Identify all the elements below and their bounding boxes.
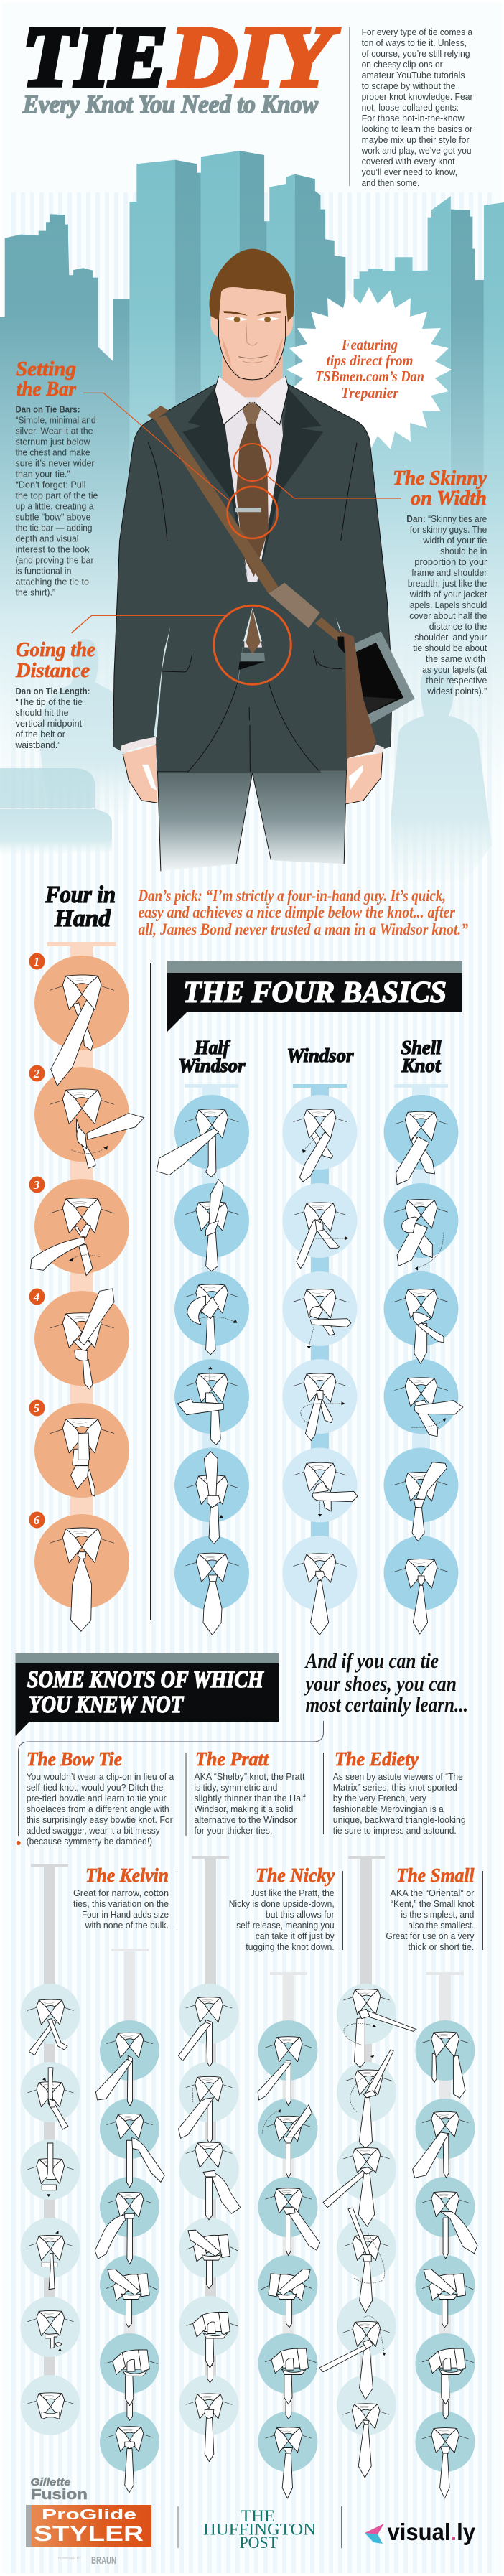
steps 3 to 6 (319, 2148, 390, 2478)
nose and mouth (243, 322, 262, 363)
kelvin column (95, 1949, 164, 2493)
lower torso behind jacket (187, 641, 322, 773)
step 6 (185, 1553, 239, 1635)
description: the small: thick or short tie. (408, 1941, 474, 1952)
column headings: Knot (401, 1055, 442, 1076)
logo wordmark: visual.ly (388, 2519, 476, 2545)
setting the bar panel (16, 358, 98, 597)
body text: tie should be about (413, 643, 487, 653)
description: the ediety: fashionable Merovingian is a (333, 1803, 444, 1814)
connector (426, 1972, 464, 2434)
intro text: and then some. (362, 177, 419, 188)
steps 2 to 6 (95, 2114, 164, 2493)
steps 1 and 2 (179, 1997, 232, 2144)
background silhouettes (0, 639, 492, 881)
step circles (258, 2020, 317, 2472)
step 4 (177, 1366, 238, 1445)
leader: setting the bar (83, 393, 229, 500)
body text: width of your jacket (409, 589, 487, 599)
step 2 (293, 1203, 348, 1269)
callout circles and leader lines (71, 393, 401, 684)
description: the bow tie: (because symmetry be damned!) (27, 1836, 152, 1847)
description: the ediety: The Ediety (335, 1748, 419, 1770)
title word: TIE: TIE (22, 9, 167, 104)
body text (15, 686, 90, 750)
title word: DIY: DIY (169, 9, 340, 104)
tablet (347, 631, 415, 727)
description: the ediety: Matrix” series, this knot sported (333, 1782, 457, 1793)
heading: the Bar (17, 378, 77, 401)
body text: (and proving the bar (16, 554, 94, 566)
description: the small: is the simplest, and (401, 1909, 474, 1920)
city skyline (0, 151, 504, 813)
banner: the four basics: THE FOUR BASICS (183, 976, 447, 1009)
gillette fusion wordmark: Gillette (30, 2476, 70, 2488)
shirt collar (215, 376, 289, 425)
steps 1 and 2 (413, 2032, 468, 2178)
description: the bow tie: pre-tied bowtie and learn to tie your (27, 1793, 167, 1803)
description: the pratt (194, 1748, 306, 1836)
step 5 (394, 1462, 448, 1541)
starburst text: Featuring (341, 336, 398, 353)
description: the pratt: The Pratt (195, 1748, 269, 1770)
description: the small: Great for use on a very (386, 1931, 475, 1941)
body text: vertical midpoint (16, 718, 83, 729)
intro text (349, 27, 473, 188)
description: the nicky: self-release, meaning you (236, 1920, 335, 1931)
starburst text: Trepanier (341, 384, 399, 401)
description: the pratt: is tidy, symmetric and (194, 1782, 277, 1793)
quote: Dan's pick: Dan’s pick: “I’m strictly a four-in-hand guy. It’s quick, (138, 887, 446, 905)
small knot second column (413, 1972, 477, 2498)
shirt (225, 397, 283, 582)
face (210, 287, 294, 380)
connector (31, 1864, 68, 2384)
intro text: not, loose-collared gents: (362, 102, 459, 113)
logo: gillette fusion proglide styler: ProGlide (42, 2507, 136, 2523)
description: the kelvin: The Kelvin (85, 1865, 169, 1886)
body text: sternum just below (16, 437, 90, 447)
heading: and if you can tie your shoes: most certainly learn... (306, 1693, 468, 1717)
intro text: you’ll ever need to know, (362, 167, 457, 177)
body text: for skinny guys. The (410, 524, 487, 535)
jacket (113, 384, 392, 772)
steps 1 and 2 (258, 2037, 312, 2178)
description: the ediety (333, 1748, 466, 1836)
connector (192, 1856, 229, 2384)
connector (185, 1084, 238, 1544)
description: the kelvin: Great for narrow, cotton (73, 1887, 169, 1898)
illustrated man in suit (113, 249, 415, 871)
circle: tie length (214, 605, 291, 684)
shell knot column (383, 1084, 463, 1634)
body text: shoulder, and your (414, 632, 487, 643)
eyes (225, 317, 280, 321)
step circles (20, 1984, 80, 2435)
description: the bow tie: You wouldn’t wear a clip-on in lieu of a (27, 1771, 174, 1782)
heading (16, 358, 77, 401)
body text: width of your tie (422, 535, 487, 546)
banner: some knots of which you knew not: SOME KNOTS OF WHICH (27, 1666, 264, 1693)
description: the bow tie (27, 1748, 174, 1847)
circle: tie width (234, 444, 271, 481)
leader: going the distance (71, 615, 227, 633)
steps 1 and 2 (27, 1999, 74, 2129)
logo: gillette fusion proglide styler: BRAUN (91, 2554, 116, 2567)
starburst callout (286, 287, 452, 452)
column headings (178, 1037, 442, 1076)
column headings: Shell (401, 1037, 442, 1058)
connector (47, 942, 116, 1522)
heading (15, 639, 95, 682)
description: the pratt: alternative to the Windsor (194, 1814, 297, 1825)
starburst text: tips direct from (326, 352, 414, 369)
body text: of the belt or (16, 729, 66, 739)
step 5 illustration (50, 1418, 114, 1496)
step circles (179, 1984, 238, 2435)
step number badges: 6 (34, 1513, 40, 1527)
trousers (157, 768, 347, 871)
left figure (39, 639, 132, 813)
step number badges: 4 (33, 1290, 39, 1304)
body text: is functional in (16, 566, 72, 576)
steps 3 to 6 (422, 2192, 477, 2498)
circle: tie bar (228, 487, 277, 538)
body text: interest to the look (16, 544, 90, 554)
necktie (236, 424, 269, 577)
description: the pratt: Windsor, making it a solid (194, 1803, 293, 1814)
skinny on width panel (393, 467, 487, 696)
step 6 (293, 1554, 347, 1635)
description: the pratt: slightly thinner than the Half (194, 1793, 306, 1803)
intro text: amateur YouTube tutorials (362, 70, 465, 80)
body text: Dan on Tie Length: (16, 686, 90, 696)
right figure (391, 668, 492, 881)
body text: lapels. Lapels should (408, 599, 487, 610)
banner: some knots of which you knew not: YOU KNEW NOT (29, 1691, 184, 1718)
heading (393, 467, 487, 510)
intro text: ton of ways to tie it. Unless, (362, 37, 467, 48)
heading: and if you can tie your shoes (304, 1649, 468, 1717)
step 4 (293, 1373, 347, 1441)
subtitle: Every Knot You Need to Know (22, 90, 319, 118)
step 4 (394, 1378, 463, 1437)
neck (222, 350, 283, 403)
heading: Setting (16, 358, 76, 381)
logo: the huffington post (203, 2507, 316, 2552)
tie tip and belt (244, 641, 262, 648)
arm gaps (154, 627, 170, 737)
column headings: Half (194, 1037, 231, 1058)
heading: and if you can tie your shoes: your shoes, you can (304, 1672, 457, 1696)
body text: cover about half the (409, 610, 487, 621)
gillette fusion wordmark (30, 2476, 88, 2503)
description: the kelvin: ties, this variation on the (73, 1898, 169, 1909)
body text: sure it’s never wider (16, 458, 95, 468)
left furniture (0, 768, 95, 808)
starburst text: TSBmen.com’s Dan (315, 368, 424, 385)
logo: visual.ly (365, 2519, 476, 2545)
step number badges (29, 953, 45, 1528)
steps 3 to 6 (261, 2188, 320, 2498)
body text: as your lapels (at (422, 664, 487, 675)
body text: the tie bar — adding (16, 523, 92, 533)
hair (209, 249, 294, 322)
leader: skinny on width (266, 475, 401, 498)
connector (270, 1972, 307, 2434)
nicky column (179, 1856, 241, 2462)
description: the nicky: tugging the knot down. (246, 1941, 335, 1952)
right lapel (258, 388, 323, 577)
heading: The Skinny (393, 467, 487, 490)
description: the small: The Small (396, 1865, 475, 1886)
step 2 (394, 1200, 448, 1271)
tie bar (235, 508, 261, 512)
body text: up a little, creating a (16, 501, 94, 511)
description: the bow tie: self-tied knot, would you? Ditch the (27, 1782, 163, 1793)
step 5 (185, 1452, 238, 1544)
step 5 (293, 1462, 358, 1517)
steps 1 and 2 (343, 1989, 416, 2148)
connector (111, 1949, 149, 2434)
body text: breadth, just like the (408, 578, 487, 589)
left lapel (182, 388, 248, 577)
intro text: on cheesy clip-ons or (362, 59, 443, 70)
logo: the huffington post: POST (240, 2534, 278, 2552)
description: the kelvin: with none of the bulk. (85, 1920, 169, 1931)
connector (293, 1084, 347, 1544)
step 1 (157, 1109, 238, 1177)
body text: should be in (440, 546, 487, 556)
hands (123, 745, 157, 803)
description: the pratt: for your thicker ties. (194, 1825, 272, 1836)
bag buckle (269, 583, 320, 628)
description: the nicky: Nicky is done upside-down, (229, 1898, 335, 1909)
body text: distance to the (429, 621, 487, 632)
powered by braun: POWERED BY (58, 2556, 81, 2559)
logo: the huffington post: THE (241, 2507, 275, 2525)
step 3 (293, 1289, 351, 1349)
tie knot (242, 402, 261, 424)
heading: four in hand (45, 882, 116, 932)
intro text: For every type of tie comes a (362, 27, 473, 37)
description: the nicky: The Nicky (256, 1865, 335, 1886)
step 1 illustration (50, 975, 114, 1086)
step number badges: 5 (34, 1401, 40, 1415)
step 6 (394, 1559, 448, 1634)
bag strap (154, 415, 278, 594)
description: the ediety: by the very French, very (333, 1793, 426, 1803)
step circles (283, 1095, 358, 1610)
logo: the huffington post: HUFFINGTON (203, 2520, 316, 2539)
step circles (34, 956, 129, 1609)
body text: than your tie.” (16, 468, 70, 480)
banner: the four basics (167, 961, 462, 1032)
intro text: of course, you’re still relying (362, 48, 470, 59)
body text: subtle "bow" above (16, 511, 90, 523)
eyebrows (223, 311, 281, 316)
body text: proportion to your (414, 556, 487, 567)
intro text: maybe mix up their style for (362, 134, 470, 145)
connector (348, 1856, 385, 2384)
step 1 (95, 2033, 153, 2106)
intro text: work and play, we’ve got you (361, 145, 472, 156)
body text: the same width (426, 653, 485, 664)
body text (16, 403, 98, 597)
logo icon (365, 2524, 384, 2534)
body text: their respective (426, 675, 487, 686)
step circles (337, 1984, 396, 2435)
step circles (174, 1095, 249, 1610)
quote: Dan's pick (138, 887, 468, 938)
gillette fusion wordmark: Fusion (31, 2487, 88, 2503)
small knot column (319, 1856, 416, 2478)
body text: the top part of the tie (16, 490, 98, 501)
step 3 (185, 1284, 238, 1355)
description: the kelvin (73, 1865, 169, 1931)
body text (406, 513, 487, 696)
body text: “Simple, minimal and (16, 415, 96, 425)
description: the small: also the smallest. (408, 1920, 474, 1931)
windsor column (283, 1084, 358, 1635)
nicky second column (258, 1972, 320, 2498)
heading: four in hand: Four in (45, 882, 116, 908)
step circles (415, 2020, 475, 2472)
going the distance panel (15, 639, 95, 750)
title (22, 9, 340, 118)
steps 3 to 6 (27, 2143, 74, 2419)
heading: on Width (411, 487, 487, 510)
connector (394, 1084, 448, 1544)
body text: silver. Wear it at the (16, 425, 93, 437)
steps 3 to 6 (186, 2142, 241, 2462)
step circles (383, 1095, 458, 1610)
intro text: to scrape by without the (362, 80, 456, 91)
step circles (100, 2020, 159, 2472)
body text: attaching the tie to (16, 576, 89, 587)
bow tie column (20, 1864, 80, 2435)
intro text: looking to learn the basics or (362, 123, 473, 134)
step 2 illustration (50, 1089, 144, 1168)
body text: widest points).” (426, 686, 487, 696)
half windsor column (157, 1084, 249, 1635)
proglide badge (26, 2505, 32, 2547)
body text: the shirt).” (16, 587, 55, 597)
intro text: For those not-in-the-know (362, 113, 465, 123)
heading: Distance (15, 660, 90, 682)
column headings: Windsor (287, 1045, 354, 1066)
step 3 (394, 1289, 448, 1363)
heading: and if you can tie your shoes: And if you can tie (304, 1649, 439, 1673)
body text: Dan: “Skinny ties are (406, 513, 487, 524)
description: the kelvin: Four in Hand adds size (82, 1909, 169, 1920)
body text: should hit the (16, 707, 69, 718)
cuffs (121, 737, 156, 752)
description: the small: AKA the “Oriental” or (390, 1887, 475, 1898)
description: the bow tie: shoelaces from a different angle with (27, 1803, 169, 1814)
description: the pratt: AKA “Shelby” knot, the Pratt (194, 1771, 305, 1782)
column headings: Windsor (178, 1055, 246, 1076)
description: the ediety: unique, backward triangle-looking (333, 1814, 466, 1825)
intro text: covered with every knot (362, 156, 455, 167)
description: the nicky (229, 1865, 335, 1952)
step 1 (293, 1109, 347, 1182)
step 2 (185, 1180, 238, 1271)
banner: some knots of which you knew not (16, 1653, 279, 1736)
step number badges: 2 (33, 1067, 40, 1081)
heading: four in hand: Hand (54, 905, 111, 932)
description: the small (386, 1865, 475, 1952)
description: the bow tie: added swagger, wear it a bit messy (27, 1825, 160, 1836)
starburst text (315, 336, 424, 401)
body text: Dan on Tie Bars: (16, 403, 80, 415)
description: the bow tie: The Bow Tie (27, 1748, 122, 1770)
connector line to descriptions (17, 1721, 323, 1845)
body text: “Don’t forget: Pull (16, 480, 86, 490)
body text: frame and shoulder (411, 567, 487, 578)
description: the nicky: Just like the Pratt, the (251, 1887, 335, 1898)
step 3 illustration (31, 1198, 114, 1276)
step 1 (394, 1111, 448, 1185)
quote: Dan's pick: easy and achieves a nice dimple below the knot... after (138, 903, 456, 921)
body text: depth and visual (16, 533, 79, 544)
description: the nicky: but this allows for (266, 1909, 335, 1920)
logo: gillette fusion proglide styler: STYLER (34, 2521, 144, 2546)
description: the ediety: tie sure to impress and astound. (333, 1825, 457, 1836)
description: the bow tie: this surprisingly easy bowtie knot. For (27, 1814, 173, 1825)
description: the small: “Kent,” the Small knot (391, 1898, 475, 1909)
description: the ediety: As seen by astute viewers of “The (333, 1771, 463, 1782)
body text: waistband.” (15, 739, 60, 750)
step number badges: 3 (33, 1178, 40, 1192)
messenger bag (339, 630, 376, 759)
step 6 illustration (50, 1528, 114, 1631)
intro text: proper knot knowledge. Fear (362, 91, 473, 102)
description: the nicky: can take it off just by (256, 1931, 335, 1941)
starburst shape (286, 287, 452, 452)
step 4 illustration (50, 1289, 114, 1389)
heading: Going the (16, 639, 95, 661)
step number badges: 1 (34, 955, 39, 969)
logo: gillette fusion proglide styler (26, 2476, 151, 2567)
body text: the chest and make (16, 447, 90, 458)
body text: “The tip of the tie (16, 696, 83, 707)
four in hand column (29, 942, 144, 1631)
